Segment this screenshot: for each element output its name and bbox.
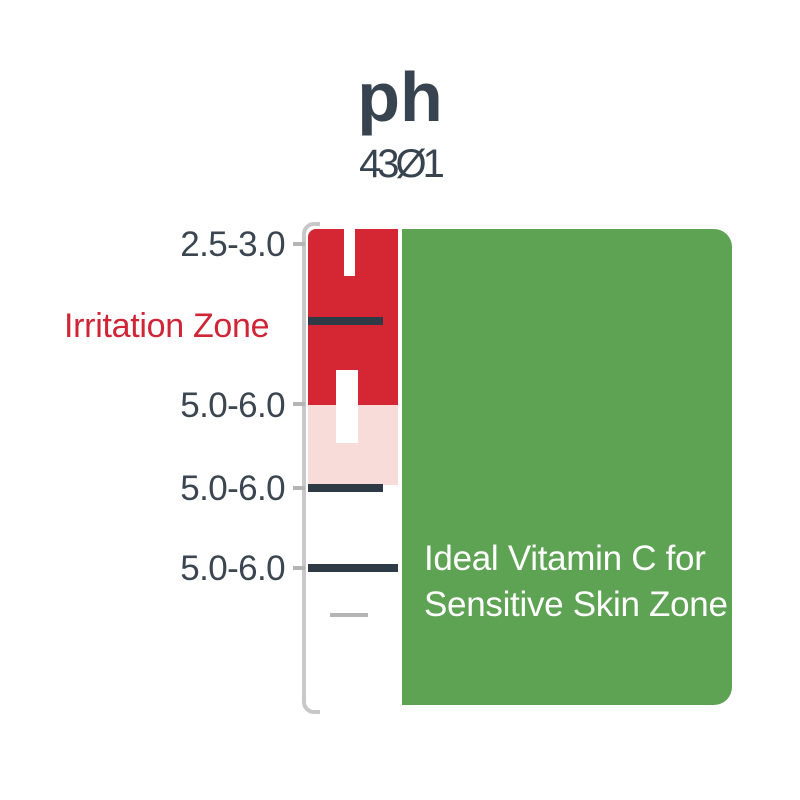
bracket <box>302 222 320 714</box>
subtitle: 43Ø1 <box>359 142 441 186</box>
dark bars <box>308 317 383 325</box>
label: 5.0-6.0 c: 5.0-6.0 <box>180 549 285 588</box>
label: 5.0-6.0 b: 5.0-6.0 <box>180 469 285 508</box>
label: Irritation Zone: Irritation Zone <box>64 307 269 345</box>
notches <box>344 229 355 276</box>
ticks <box>293 242 305 246</box>
pink zone <box>308 405 398 485</box>
title: ph <box>357 58 443 136</box>
green ideal zone <box>402 229 732 705</box>
label: 2.5-3.0: 2.5-3.0 <box>180 225 285 264</box>
zone text: Ideal Vitamin C for <box>424 539 706 578</box>
zone text <box>424 539 728 624</box>
gauge <box>293 222 732 714</box>
red irritation zone <box>308 229 398 405</box>
label: 5.0-6.0 a: 5.0-6.0 <box>180 386 285 425</box>
zone text: Sensitive Skin Zone <box>424 585 728 624</box>
